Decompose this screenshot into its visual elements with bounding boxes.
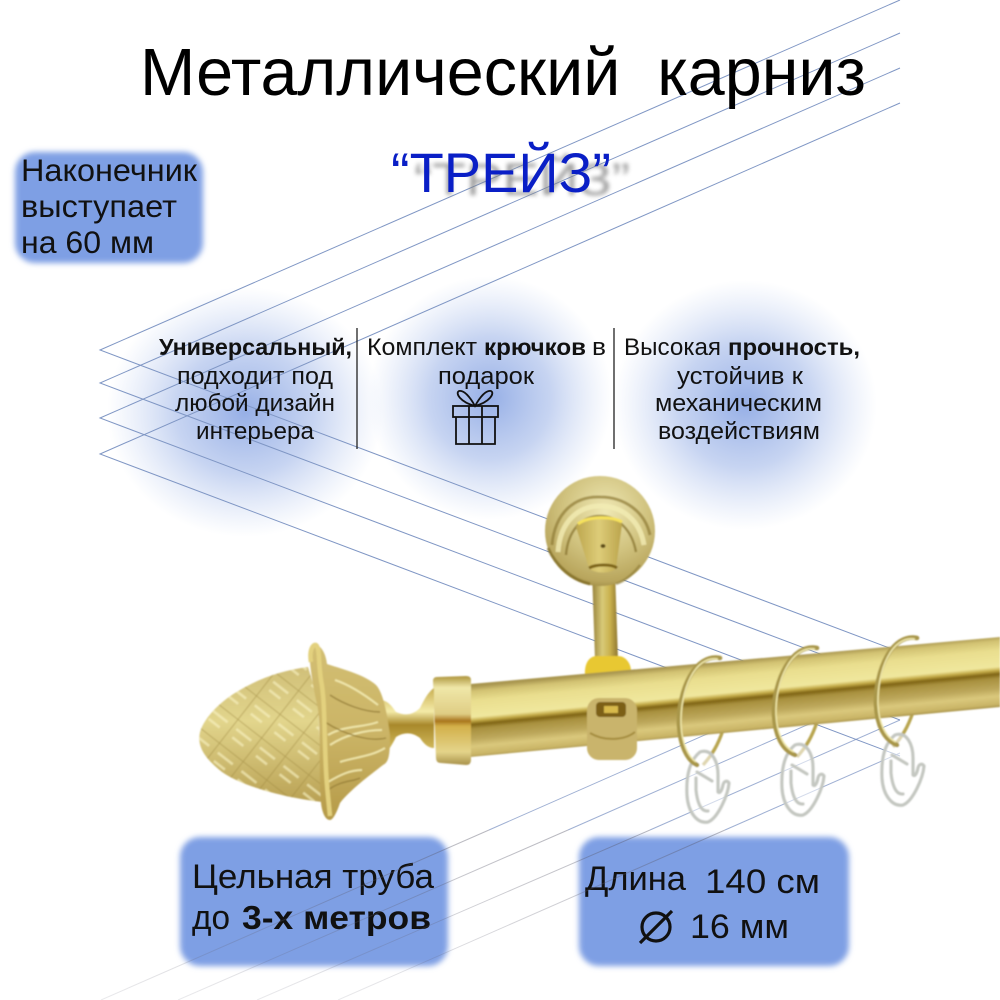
decorative diagonal lines <box>100 0 900 830</box>
callout: tip protrusion: Наконечник <box>21 152 197 188</box>
product: curtain rod <box>199 476 1000 822</box>
text block: hooks gift: подарок <box>438 363 535 390</box>
text block: hooks gift <box>367 334 606 390</box>
ring back segments <box>703 712 913 765</box>
callout: length and diameter <box>579 837 849 966</box>
rod clamp <box>587 698 637 760</box>
finial acorn body <box>199 667 322 802</box>
text block: hooks gift: крючков <box>484 334 586 360</box>
rod tube <box>470 637 1000 757</box>
text block: strength: устойчив к <box>677 363 804 390</box>
bracket foot <box>585 656 631 676</box>
text block: strength <box>624 334 860 445</box>
text block: hooks gift: в <box>592 334 606 361</box>
text block: universal: Универсальный, <box>159 334 352 360</box>
callout: length and diameter: 140 см <box>705 863 820 901</box>
callout: tip protrusion: выступает <box>21 188 177 224</box>
text block: strength: механическим <box>655 390 822 417</box>
callout: solid tube: 3-х метров <box>242 899 431 936</box>
glow: middle column <box>368 276 612 520</box>
callout: length and diameter: 16 мм <box>690 908 789 946</box>
callout: solid tube <box>180 837 448 966</box>
text block: universal: подходит под <box>177 363 333 390</box>
text block: strength: прочность, <box>728 334 860 360</box>
bracket wall ball <box>545 476 655 586</box>
bracket stem <box>592 570 618 660</box>
callout: tip protrusion <box>15 152 203 263</box>
title: Металлический карниз <box>140 35 866 110</box>
text block: universal: интерьера <box>196 418 315 445</box>
finial acorn cap <box>310 645 390 820</box>
icon: diameter symbol <box>640 911 672 943</box>
text block: universal: любой дизайн <box>175 390 335 417</box>
text block: strength: Высокая <box>624 334 721 361</box>
subtitle with shadow: “ТРЕЙЗ” <box>391 141 611 204</box>
callout: solid tube: до <box>192 899 230 937</box>
glow: right column <box>613 280 877 530</box>
icon: gift box <box>453 391 498 444</box>
glow: left column <box>107 287 383 537</box>
callout: tip protrusion: на 60 мм <box>21 224 154 260</box>
curtain rings <box>679 638 917 765</box>
rod collar <box>433 676 471 765</box>
text block: hooks gift: Комплект <box>367 334 477 361</box>
callout: length and diameter: Длина <box>585 860 686 898</box>
text block: strength: воздействиям <box>658 418 820 445</box>
text block: universal <box>159 334 352 445</box>
callout: solid tube: Цельная труба <box>192 858 435 896</box>
finial neck <box>381 688 434 755</box>
clear plastic hooks <box>687 734 924 822</box>
subtitle with shadow: “ТРЕЙЗ” <box>414 154 630 205</box>
